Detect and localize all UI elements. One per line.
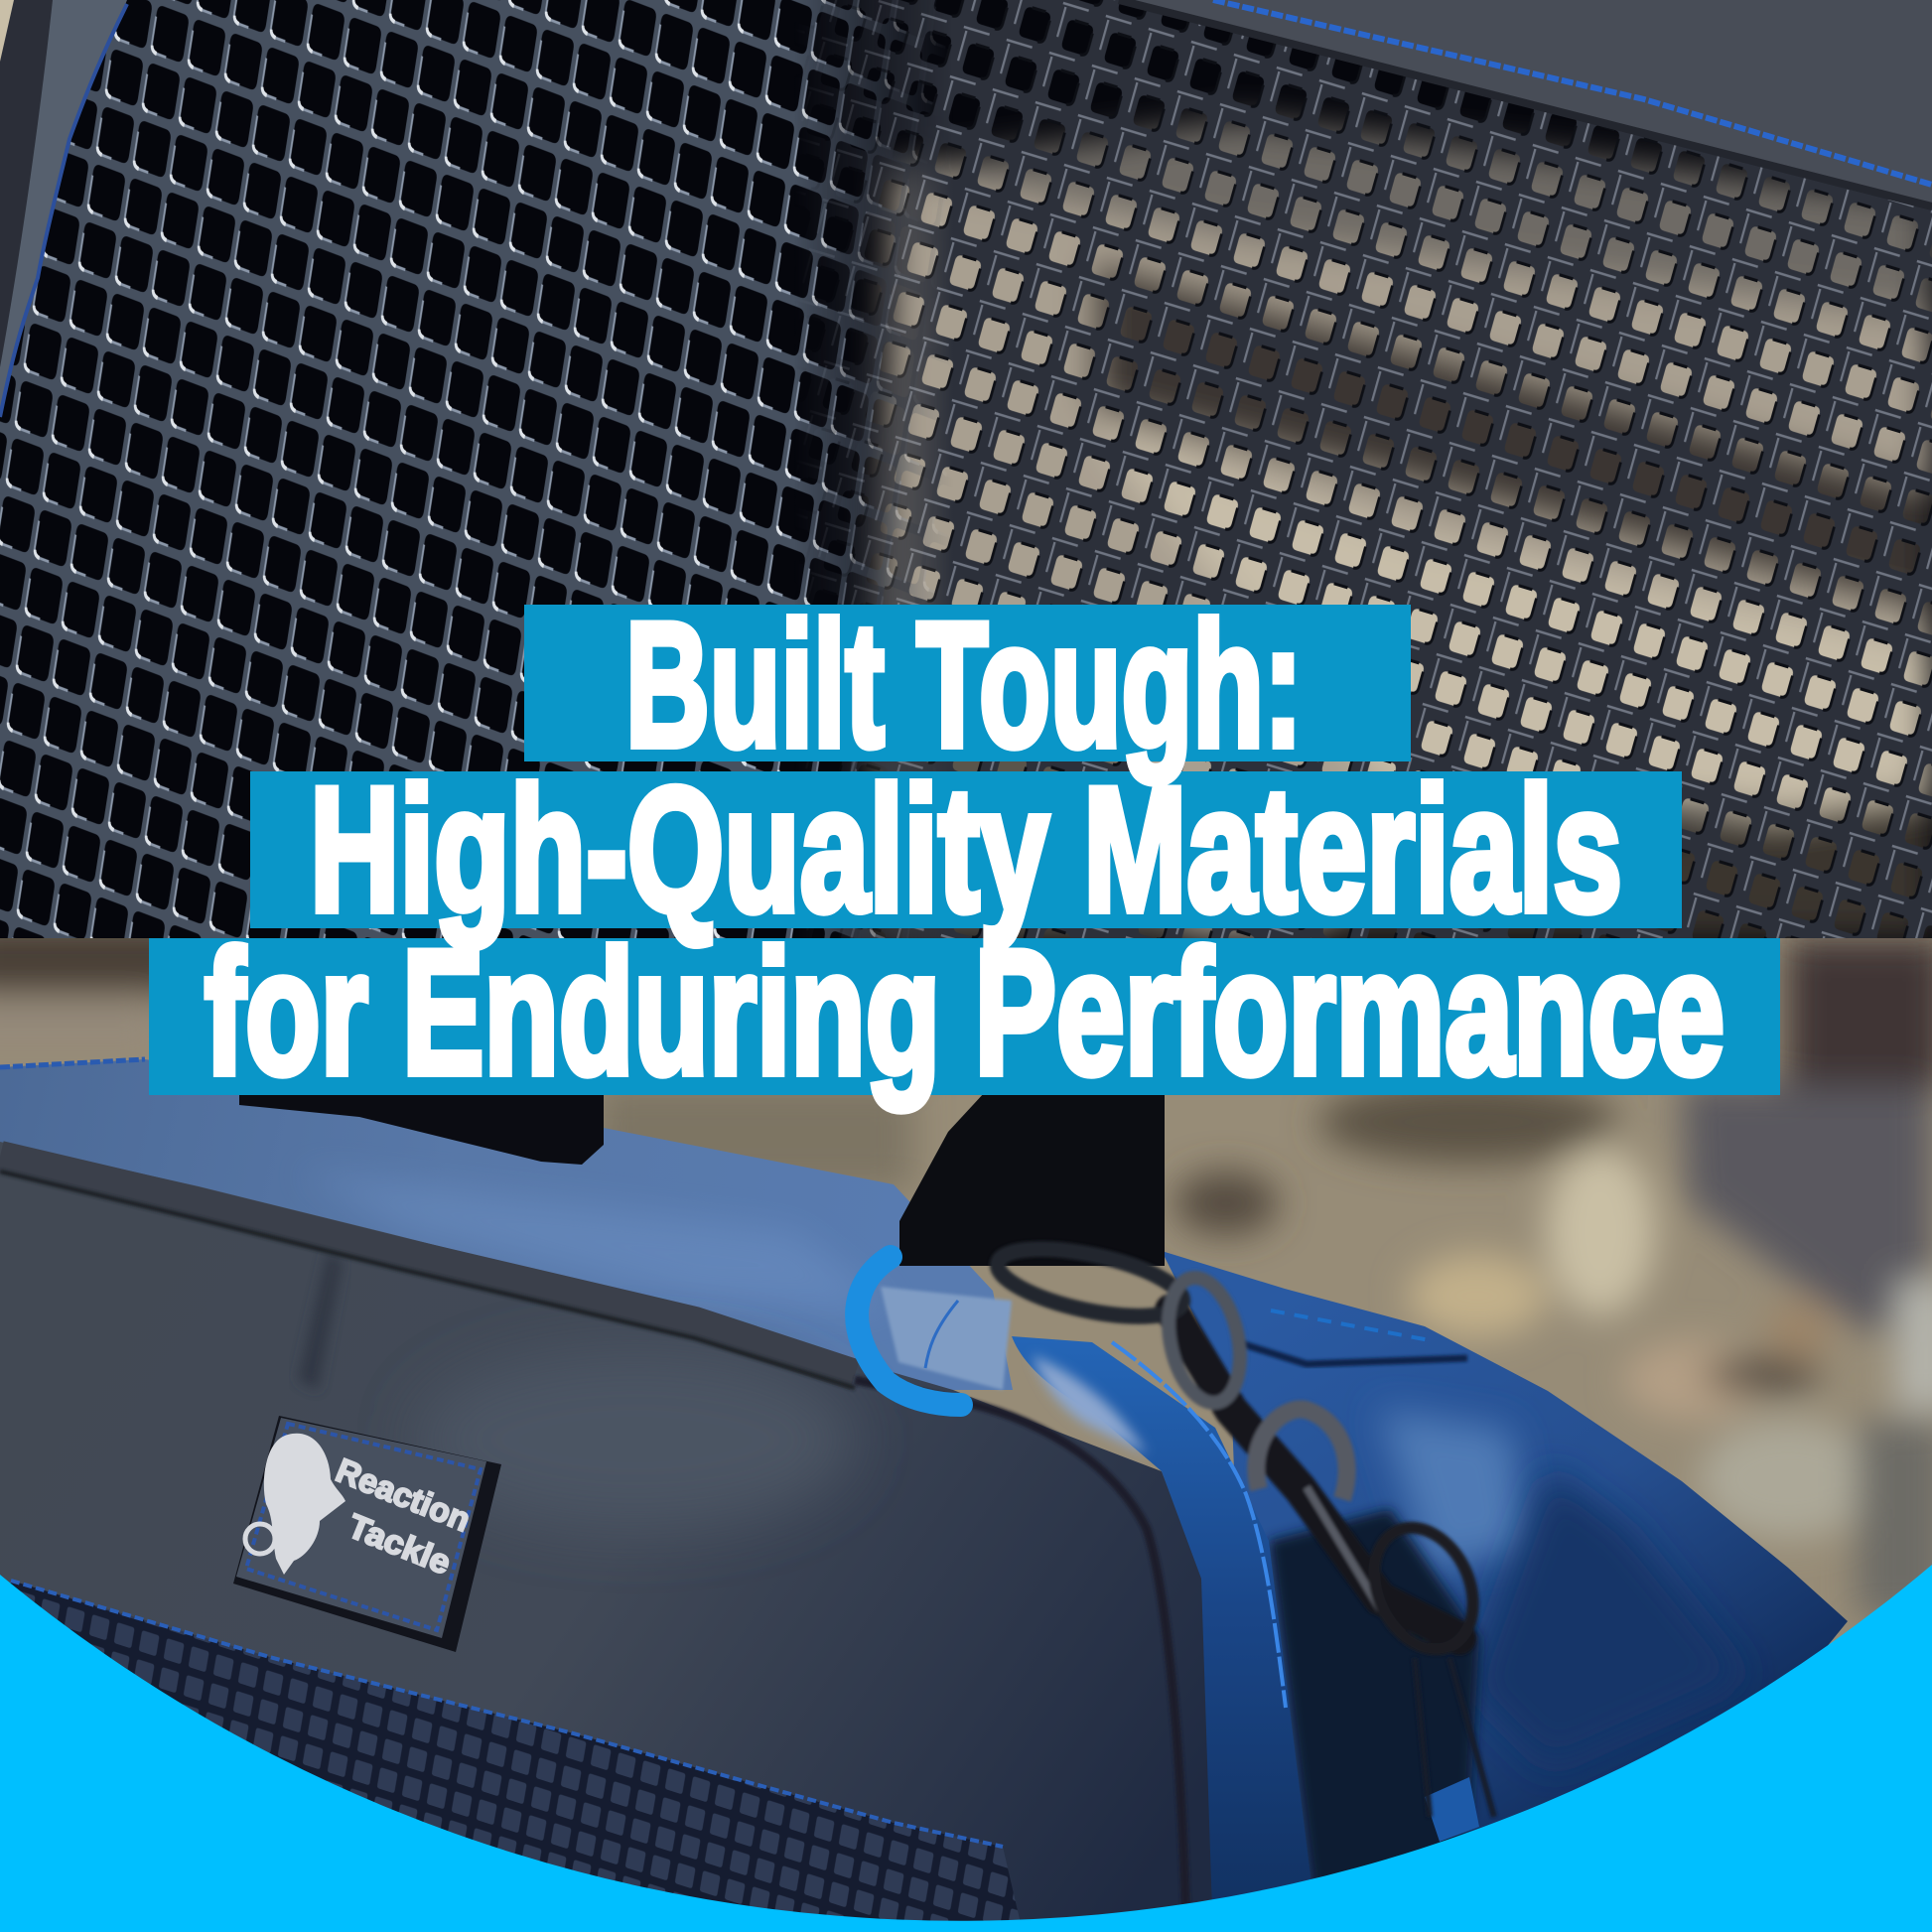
side panel highlight [1380, 1410, 1529, 1569]
cyan bottom arc [0, 1565, 1932, 1932]
title banner [149, 586, 1780, 1111]
title bar line 3 [149, 938, 1780, 1095]
mesh netting right section [802, 0, 1932, 938]
title text line 1: Built Tough: [625, 586, 1303, 783]
fabric border: left side [0, 0, 127, 417]
mesh netting left section [0, 0, 944, 938]
front rope piping [0, 1157, 855, 1375]
title bar line 1 [524, 605, 1411, 761]
bag front face [0, 1142, 1226, 1932]
photo: mesh pocket close-up [0, 0, 1932, 938]
blurred light background behind mesh [874, 119, 1932, 938]
top panel sheen [365, 1187, 838, 1296]
fabric border: top right with blue stitching [1119, 0, 1932, 207]
light-blue handle tube [881, 1287, 1012, 1390]
blue loop ring [857, 1257, 961, 1405]
patch stitching [246, 1424, 481, 1630]
bag top stitched edge [0, 1059, 145, 1067]
right black strap [899, 1092, 1165, 1266]
left black strap [239, 1095, 604, 1165]
side panel flap seam [1237, 1342, 1467, 1364]
side panel dark fold [1479, 1467, 1692, 1731]
bag right side panel [1162, 1251, 1848, 1932]
title bar line 2 [250, 771, 1682, 928]
band light highlight [1033, 1355, 1147, 1454]
brand patch [233, 1416, 501, 1652]
logo wordmark: Reaction [331, 1451, 476, 1540]
dark recess under chain [1269, 1509, 1479, 1932]
mascot logo [245, 1434, 345, 1575]
photo: bag with handles and chain [0, 923, 1932, 1932]
mesh pocket [0, 1581, 1023, 1932]
logo wordmark second line: Tackle [343, 1507, 456, 1583]
front face light patch [417, 1350, 854, 1529]
front face wrinkle [298, 1251, 343, 1390]
blurred outdoor background [0, 923, 1932, 1618]
bag top panel [0, 1059, 1013, 1390]
flap stitching [1271, 1311, 1430, 1340]
chain links [992, 1236, 1494, 1817]
blue piping band [1012, 1336, 1317, 1932]
curved seam toward band [855, 1380, 1186, 1932]
lanyard tags [1425, 1777, 1479, 1842]
piping dark underside [0, 1172, 855, 1388]
tube stitching [925, 1301, 958, 1368]
band stitch line [1112, 1342, 1286, 1708]
pocket stitching [11, 1581, 1003, 1847]
